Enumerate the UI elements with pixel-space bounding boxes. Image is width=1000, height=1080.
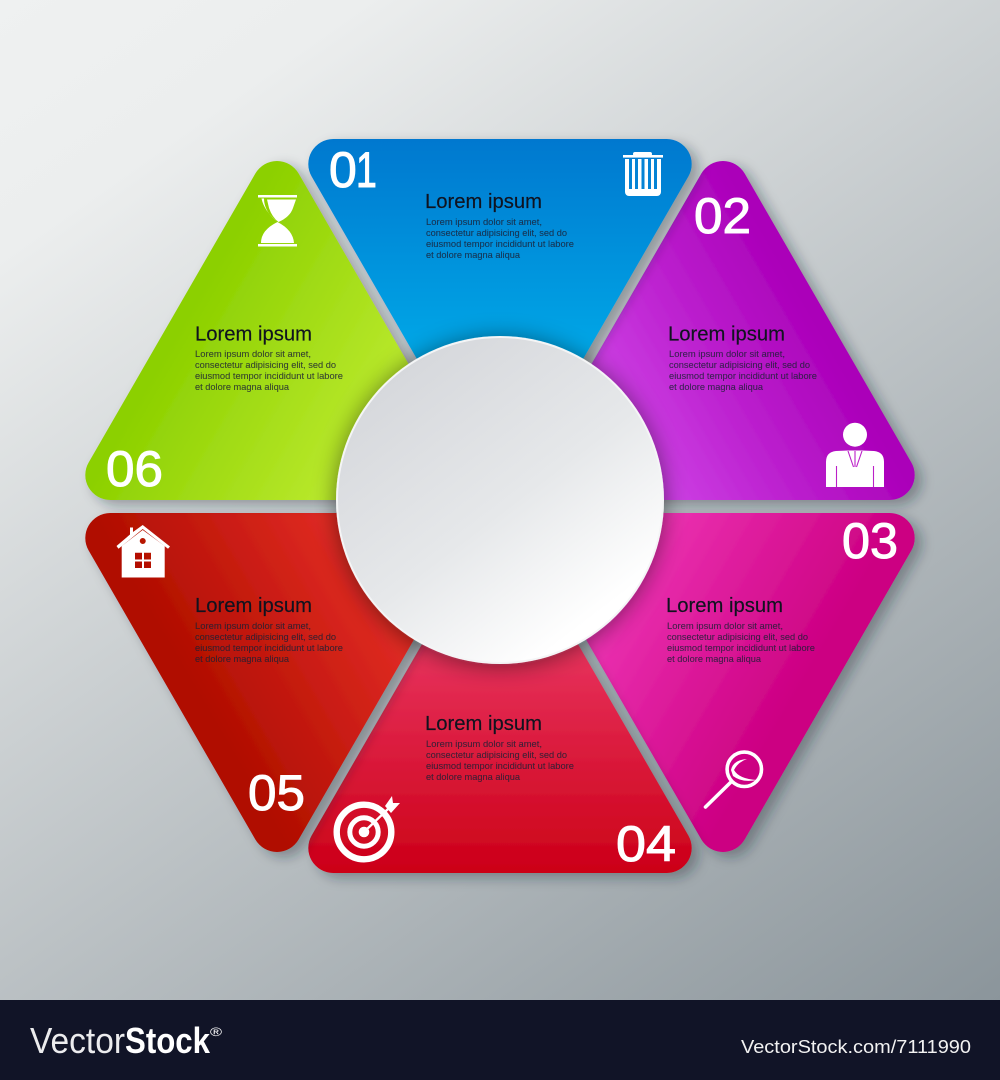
number 04: 04: [616, 816, 676, 872]
panel 02: purple triangle: [531, 161, 915, 500]
text block 01: et dolore magna aliqua: [426, 250, 521, 261]
icon: magnifying glass: [706, 752, 762, 807]
text block 05: et dolore magna aliqua: [195, 654, 290, 665]
text block 05: Lorem ipsum dolor sit amet,: [195, 621, 311, 632]
text block 05: consectetur adipisicing elit, sed do: [195, 632, 336, 643]
text block 06: eiusmod tempor incididunt ut labore: [195, 371, 343, 382]
text block 04: eiusmod tempor incididunt ut labore: [426, 761, 574, 772]
icon: trash can: [623, 152, 663, 196]
number 02: 02: [694, 188, 751, 244]
icon: target with arrow: [337, 796, 400, 859]
text block 04: et dolore magna aliqua: [426, 772, 521, 783]
footer bar: [0, 1000, 1000, 1080]
text block 03: consectetur adipisicing elit, sed do: [667, 632, 808, 643]
text block 06: [195, 324, 343, 393]
number 01: 1: [356, 143, 377, 198]
text block 06: et dolore magna aliqua: [195, 382, 290, 393]
text block 05: eiusmod tempor incididunt ut labore: [195, 643, 343, 654]
number 01: [329, 142, 377, 198]
text block 03: [666, 595, 815, 665]
text block 06: Lorem ipsum: [195, 324, 312, 346]
panel 03: magenta triangle: [531, 513, 915, 852]
text block 02: Lorem ipsum: [668, 324, 785, 346]
text block 02: Lorem ipsum dolor sit amet,: [669, 349, 785, 360]
footer logo: Stock: [125, 1020, 211, 1061]
footer logo: [30, 1020, 222, 1061]
text block 03: eiusmod tempor incididunt ut labore: [667, 643, 815, 654]
panel 06: green triangle: [85, 161, 469, 500]
text block 01: [425, 191, 574, 261]
text block 02: consectetur adipisicing elit, sed do: [669, 360, 810, 371]
text block 01: consectetur adipisicing elit, sed do: [426, 228, 567, 239]
icon: businessman: [826, 423, 884, 487]
text block 04: [425, 713, 574, 783]
text block 04: Lorem ipsum: [425, 713, 542, 735]
text block 03: et dolore magna aliqua: [667, 654, 762, 665]
text block 05: [195, 595, 343, 665]
text block 06: consectetur adipisicing elit, sed do: [195, 360, 336, 371]
footer logo: Vector: [30, 1020, 125, 1061]
icon: hourglass: [258, 195, 297, 246]
panel 01: blue triangle: [308, 139, 692, 478]
text block 01: eiusmod tempor incididunt ut labore: [426, 239, 574, 250]
number 05: 05: [248, 765, 305, 821]
text block 02: et dolore magna aliqua: [669, 382, 764, 393]
text block 06: Lorem ipsum dolor sit amet,: [195, 349, 311, 360]
text block 03: Lorem ipsum dolor sit amet,: [667, 621, 783, 632]
text block 03: Lorem ipsum: [666, 595, 783, 617]
icon: house: [116, 525, 170, 578]
text block 01: Lorem ipsum: [425, 191, 542, 213]
text block 05: Lorem ipsum: [195, 595, 312, 617]
number 06: 06: [106, 441, 163, 497]
number 03: 03: [842, 513, 898, 569]
centre circle: [336, 336, 664, 664]
text block 04: Lorem ipsum dolor sit amet,: [426, 739, 542, 750]
panel 05: red triangle: [85, 513, 469, 852]
number 01: 0: [329, 142, 357, 198]
text block 01: Lorem ipsum dolor sit amet,: [426, 217, 542, 228]
text block 02: eiusmod tempor incididunt ut labore: [669, 371, 817, 382]
footer image id: VectorStock.com/7111990: [741, 1036, 971, 1057]
footer logo: ®: [210, 1025, 222, 1039]
text block 04: consectetur adipisicing elit, sed do: [426, 750, 567, 761]
text block 02: [668, 324, 817, 393]
panel 04: crimson triangle: [308, 534, 692, 873]
